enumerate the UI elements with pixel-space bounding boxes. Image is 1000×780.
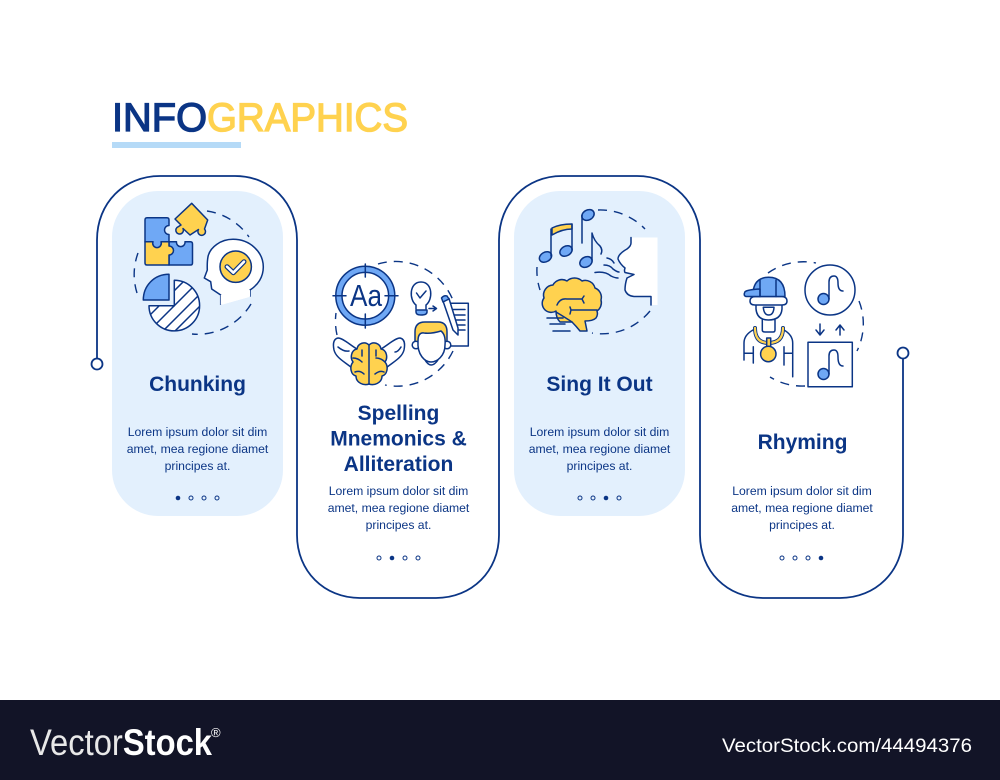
title underline: [112, 142, 241, 148]
footer bar: [0, 700, 1000, 780]
heading: rhyming: Rhyming: [758, 431, 847, 454]
title: GRAPHICS: [207, 96, 408, 140]
puzzle piece: bottom left: [145, 242, 174, 265]
puzzle piece: floating yellow: [175, 203, 208, 235]
winged brain: [333, 338, 405, 385]
text: chunking body: amet, mea regione diamet: [127, 442, 269, 456]
target with Aa: Aa: [350, 278, 383, 313]
heading: spelling mnemonics and alliteration: Alliteration: [344, 453, 453, 476]
panel: chunking background: [112, 191, 283, 516]
text: sing it out body: amet, mea regione diamet: [529, 442, 671, 456]
rapper with cap and medal: [744, 277, 793, 377]
text: chunking body: Lorem ipsum dolor sit dim: [128, 425, 267, 439]
pagination dots: [780, 556, 823, 560]
label: chunking: Chunking: [149, 373, 246, 396]
text: spelling body: Lorem ipsum dolor sit dim: [329, 484, 468, 498]
puzzle piece: top left: [145, 218, 169, 248]
label: sing it out: Sing It Out: [546, 373, 653, 396]
text: rhyming body: principes at.: [769, 518, 835, 532]
title: INFO: [112, 96, 207, 140]
icon: chunking: [134, 203, 263, 346]
music note in square: [808, 342, 852, 387]
heading: spelling mnemonics and alliteration: Spelling: [358, 402, 439, 425]
footer logo: VectorStock: [30, 722, 212, 763]
sound waves: [595, 258, 619, 278]
pie chart: hatched slice: [148, 280, 200, 332]
pagination dots: [176, 496, 219, 500]
pagination dots: [377, 556, 420, 560]
icon: spelling mnemonics: [333, 261, 468, 386]
icon: sing it out: [537, 207, 658, 334]
text: rhyming body: amet, mea regione diamet: [731, 501, 873, 515]
music notes: [537, 207, 602, 270]
light bulb: [411, 282, 436, 315]
heading: spelling mnemonics and alliteration: Mnemonics &: [330, 428, 467, 450]
icon: rhyming: [744, 262, 863, 387]
pie chart: blue slice: [143, 274, 169, 300]
connecting outline: [92, 176, 908, 598]
music note in circle: [805, 265, 855, 315]
footer url: VectorStock.com/44494376: [722, 736, 972, 757]
title: [112, 96, 408, 140]
panel: sing it out background: [514, 191, 685, 516]
person head with hair: [412, 322, 451, 365]
text: sing it out body: Lorem ipsum dolor sit dim: [530, 425, 669, 439]
text: sing it out body: principes at.: [567, 459, 632, 473]
brain: [542, 278, 601, 331]
pencil: [442, 296, 458, 335]
text: chunking body: principes at.: [165, 459, 230, 473]
registered mark: ®: [211, 725, 221, 740]
head with check: [204, 239, 263, 305]
singing face: [618, 238, 658, 305]
arrows: [816, 324, 844, 335]
pagination dots: [578, 496, 621, 500]
text: spelling body: amet, mea regione diamet: [328, 501, 470, 515]
puzzle piece: bottom right: [169, 242, 192, 265]
text: rhyming body: Lorem ipsum dolor sit dim: [732, 484, 872, 498]
notepad: [448, 303, 468, 346]
text: spelling body: principes at.: [366, 518, 431, 532]
